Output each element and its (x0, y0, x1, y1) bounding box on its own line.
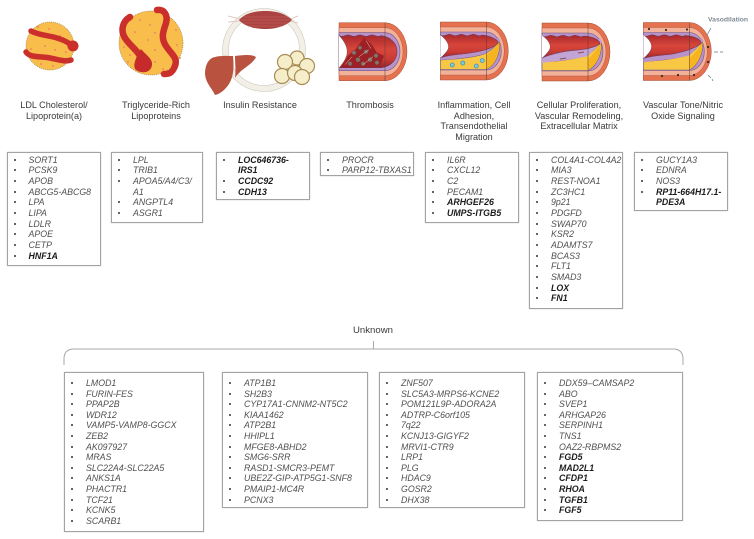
title: cellular proliferation: Vascular Remodeling, (535, 110, 623, 120)
gene list: inflammation: PECAM1 (447, 187, 483, 197)
gene list: cellular proliferation: KSR2 (551, 229, 574, 239)
gene list: unknown column 2: ATP2B1 (244, 420, 276, 430)
gene list: unknown column 3: 7q22 (401, 420, 421, 430)
gene list: unknown column 3: KCNJ13-GIGYF2 (401, 431, 469, 441)
gene list: insulin resistance: CDH13 (238, 187, 267, 197)
gene list: unknown column 2: HHIPL1 (244, 431, 275, 441)
gene list: LDL cholesterol: LPA (28, 197, 44, 207)
gene list: vascular tone: RP11-664H17.1- (656, 187, 721, 197)
title: inflammation: Transendothelial (441, 121, 507, 131)
gene list: unknown column 4: SERPINH1 (559, 420, 603, 430)
gene list: unknown column 2: PCNX3 (244, 495, 273, 505)
gene list: unknown column 2 (222, 372, 368, 508)
icon: thrombosis vessel (339, 23, 407, 81)
gene list: cellular proliferation: FLT1 (551, 261, 571, 271)
gene list: triglyceride-rich lipoproteins: A1 (133, 187, 144, 197)
gene list: unknown column 3 (379, 372, 525, 508)
gene list: insulin resistance: IRS1 (238, 165, 258, 175)
title: triglyceride-rich lipoproteins: Lipoproteins (131, 110, 181, 120)
gene list: triglyceride-rich lipoproteins: ASGR1 (133, 208, 163, 218)
gene list: insulin resistance: CCDC92 (238, 176, 273, 186)
title: inflammation: Adhesion, (454, 110, 494, 120)
gene list: LDL cholesterol: LIPA (28, 208, 47, 218)
gene list: unknown column 4: TNS1 (559, 431, 582, 441)
gene list: unknown column 4: FGF5 (559, 505, 581, 515)
label: vasodilation: Vasodilation (708, 16, 748, 24)
gene list: LDL cholesterol: CETP (28, 240, 52, 250)
gene list: triglyceride-rich lipoproteins (111, 152, 203, 222)
gene list: unknown column 1: MRAS (86, 452, 111, 462)
gene list: thrombosis: PARP12-TBXAS1 (342, 165, 412, 175)
title: inflammation: Migration (455, 132, 493, 142)
gene list: unknown column 4: ARHGAP26 (559, 410, 606, 420)
gene list: cellular proliferation: ADAMTS7 (551, 240, 593, 250)
gene list: unknown column 4: CFDP1 (559, 473, 588, 483)
title: vascular tone: Oxide Signaling (651, 110, 715, 120)
gene list: triglyceride-rich lipoproteins: TRIB1 (133, 165, 158, 175)
gene list: LDL cholesterol: HNF1A (28, 251, 58, 261)
gene list: unknown column 3: SLC5A3-MRPS6-KCNE2 (401, 389, 499, 399)
gene list: unknown column 1: LMOD1 (86, 378, 116, 388)
title: triglyceride-rich lipoproteins (122, 100, 190, 121)
gene list: unknown column 1: SCARB1 (86, 516, 121, 526)
gene list: insulin resistance: LOC646736- (238, 154, 289, 164)
gene list: unknown column 2: ATP1B1 (244, 378, 276, 388)
title: LDL cholesterol (20, 100, 88, 121)
gene list: cellular proliferation: SMAD3 (551, 272, 581, 282)
gene list: unknown column 1: SLC22A4-SLC22A5 (86, 463, 164, 473)
gene list: inflammation: UMPS-ITGB5 (447, 208, 501, 218)
bracket: unknown group (64, 341, 683, 365)
gene list: unknown column 2: SH2B3 (244, 389, 272, 399)
icon: vascular tone vessel (643, 22, 711, 80)
gene list: cellular proliferation: SWAP70 (551, 219, 587, 229)
gene list: unknown column 2: MFGE8-ABHD2 (244, 442, 307, 452)
title: insulin resistance: Insulin Resistance (223, 100, 297, 110)
gene list: inflammation: C2 (447, 176, 458, 186)
gene list: unknown column 1: AK097927 (86, 442, 127, 452)
gene list: vascular tone (634, 152, 728, 210)
gene list: unknown column 2: UBE2Z-GIP-ATP5G1-SNF8 (244, 473, 352, 483)
gene list: unknown column 1: TCF21 (86, 495, 113, 505)
gene list: vascular tone: PDE3A (656, 197, 685, 207)
gene list: cellular proliferation: BCAS3 (551, 251, 580, 261)
gene list: unknown column 4: OAZ2-RBPMS2 (559, 442, 621, 452)
gene list: cellular proliferation: 9p21 (551, 197, 571, 207)
gene list: thrombosis: PROCR (342, 154, 374, 164)
gene list: unknown column 1: VAMP5-VAMP8-GGCX (86, 420, 176, 430)
heading: unknown: Unknown (353, 325, 393, 336)
gene list: unknown column 3: DHX38 (401, 495, 429, 505)
icon: LDL cholesterol particle (26, 22, 78, 70)
title: inflammation (438, 100, 510, 142)
gene list: unknown column 4: RHOA (559, 484, 585, 494)
title: LDL cholesterol: LDL Cholesterol/ (20, 100, 88, 110)
gene list: LDL cholesterol: APOB (28, 176, 53, 186)
gene list: vascular tone: EDNRA (656, 165, 687, 175)
gene list: vascular tone: GUCY1A3 (656, 154, 697, 164)
gene list: unknown column 2: KIAA1462 (244, 410, 284, 420)
title: triglyceride-rich lipoproteins: Triglyceride-Rich (122, 100, 190, 110)
gene list: unknown column 1: PPAP2B (86, 399, 120, 409)
gene list: unknown column 4: SVEP1 (559, 399, 587, 409)
gene list: unknown column 1: PHACTR1 (86, 484, 127, 494)
gene list: triglyceride-rich lipoproteins: APOA5/A4/C3/ (133, 176, 192, 186)
title: inflammation: Inflammation, Cell (438, 100, 510, 110)
title: cellular proliferation: Extracellular Matrix (540, 121, 618, 131)
gene list: LDL cholesterol: SORT1 (28, 154, 58, 164)
gene list: unknown column 2: CYP17A1-CNNM2-NT5C2 (244, 399, 348, 409)
icon: inflammation vessel (440, 22, 508, 80)
title: cellular proliferation: Cellular Proliferation, (537, 100, 621, 110)
gene list: unknown column 4: FGD5 (559, 452, 582, 462)
gene list: unknown column 3: ZNF507 (401, 378, 433, 388)
gene list: unknown column 3: HDAC9 (401, 473, 431, 483)
gene list: insulin resistance (216, 152, 310, 200)
gene list: inflammation: ARHGEF26 (447, 197, 494, 207)
gene list: LDL cholesterol (6, 152, 100, 266)
gene list: unknown column 4: MAD2L1 (559, 463, 594, 473)
gene list: cellular proliferation: ZC3HC1 (551, 187, 585, 197)
icon: triglyceride-rich lipoprotein particle (119, 10, 183, 75)
gene list: inflammation: CXCL12 (447, 165, 480, 175)
gene list: unknown column 3: PLG (401, 463, 419, 473)
icon: cellular proliferation vessel (542, 23, 610, 81)
gene list: cellular proliferation: COL4A1-COL4A2 (551, 154, 621, 164)
gene list: unknown column 4 (537, 372, 683, 521)
gene list: unknown column 2: PMAIP1-MC4R (244, 484, 304, 494)
gene list: LDL cholesterol: PCSK9 (28, 165, 57, 175)
gene list: thrombosis (320, 152, 414, 176)
gene list: cellular proliferation: FN1 (551, 293, 568, 303)
gene list: unknown column 3: MRVI1-CTR9 (401, 442, 454, 452)
gene list: unknown column 2: SMG6-SRR (244, 452, 290, 462)
title: vascular tone: Vascular Tone/Nitric (643, 100, 723, 110)
gene list: inflammation (425, 152, 519, 222)
gene list: cellular proliferation: MIA3 (551, 165, 572, 175)
gene list: unknown column 1: ANKS1A (86, 473, 121, 483)
gene list: unknown column 1: KCNK5 (86, 505, 115, 515)
gene list: unknown column 2: RASD1-SMCR3-PEMT (244, 463, 334, 473)
gene list: inflammation: IL6R (447, 154, 466, 164)
title: cellular proliferation (535, 100, 623, 131)
gene list: unknown column 4: TGFB1 (559, 495, 588, 505)
title: vascular tone (643, 100, 723, 121)
title: thrombosis: Thrombosis (346, 100, 394, 110)
gene list: unknown column 1: ZEB2 (86, 431, 108, 441)
gene list: cellular proliferation: LOX (551, 283, 569, 293)
gene list: unknown column 1: FURIN-FES (86, 389, 133, 399)
gene list: LDL cholesterol: ABCG5-ABCG8 (28, 187, 91, 197)
title: LDL cholesterol: Lipoprotein(a) (26, 110, 82, 120)
icon: insulin resistance organs (205, 11, 314, 95)
gene list: cellular proliferation (529, 152, 623, 309)
gene list: triglyceride-rich lipoproteins: LPL (133, 154, 149, 164)
gene list: LDL cholesterol: APOE (28, 229, 53, 239)
icon: nitric oxide dots and vasodilation arrows (648, 28, 723, 81)
gene list: cellular proliferation: PDGFD (551, 208, 582, 218)
gene list: vascular tone: NOS3 (656, 176, 680, 186)
gene list: LDL cholesterol: LDLR (28, 219, 51, 229)
gene list: unknown column 1 (64, 372, 204, 532)
gene list: unknown column 1: WDR12 (86, 410, 117, 420)
gene list: unknown column 3: LRP1 (401, 452, 423, 462)
gene list: unknown column 3: ADTRP-C6orf105 (401, 410, 470, 420)
gene list: cellular proliferation: REST-NOA1 (551, 176, 601, 186)
gene list: unknown column 3: GOSR2 (401, 484, 432, 494)
gene list: unknown column 4: DDX59–CAMSAP2 (559, 378, 634, 388)
gene list: triglyceride-rich lipoproteins: ANGPTL4 (133, 197, 173, 207)
gene list: unknown column 4: ABO (559, 389, 578, 399)
gene list: unknown column 3: POM121L9P-ADORA2A (401, 399, 496, 409)
